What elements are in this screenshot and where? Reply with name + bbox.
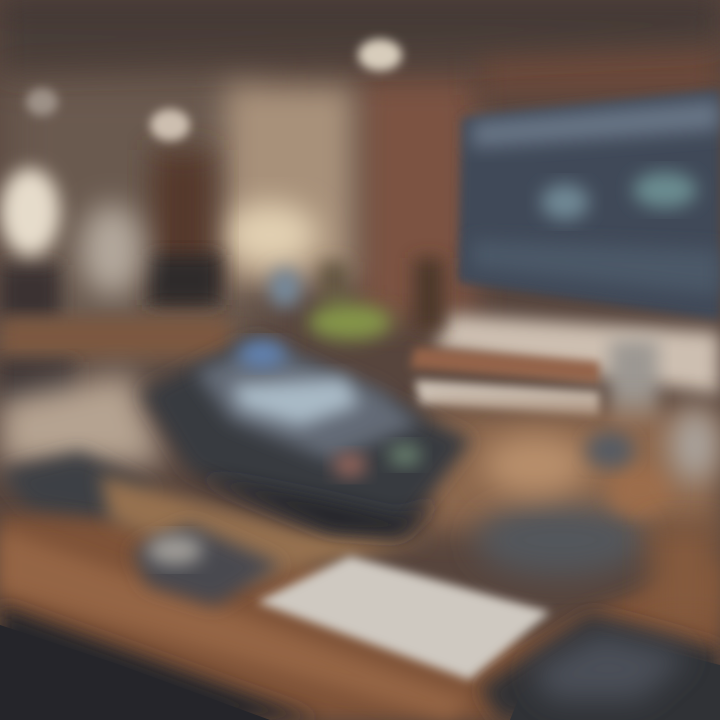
- dark keyboard bottom right: [480, 614, 720, 720]
- white paper: [257, 556, 550, 680]
- monitor: [458, 90, 720, 320]
- central tan wall: [222, 85, 355, 285]
- right desk objects: [475, 407, 720, 625]
- ceiling lights: [26, 39, 402, 141]
- right counter below monitor: [410, 314, 720, 530]
- left shelves and windows: [0, 150, 230, 407]
- table surface: [0, 475, 720, 720]
- small figure and plant behind device: [269, 258, 444, 340]
- payment terminal device: [142, 338, 472, 535]
- table underside shadow: [0, 605, 320, 720]
- small phone on desk: [132, 524, 282, 606]
- ceiling: [0, 0, 720, 70]
- left lower desk clutter: [0, 372, 165, 522]
